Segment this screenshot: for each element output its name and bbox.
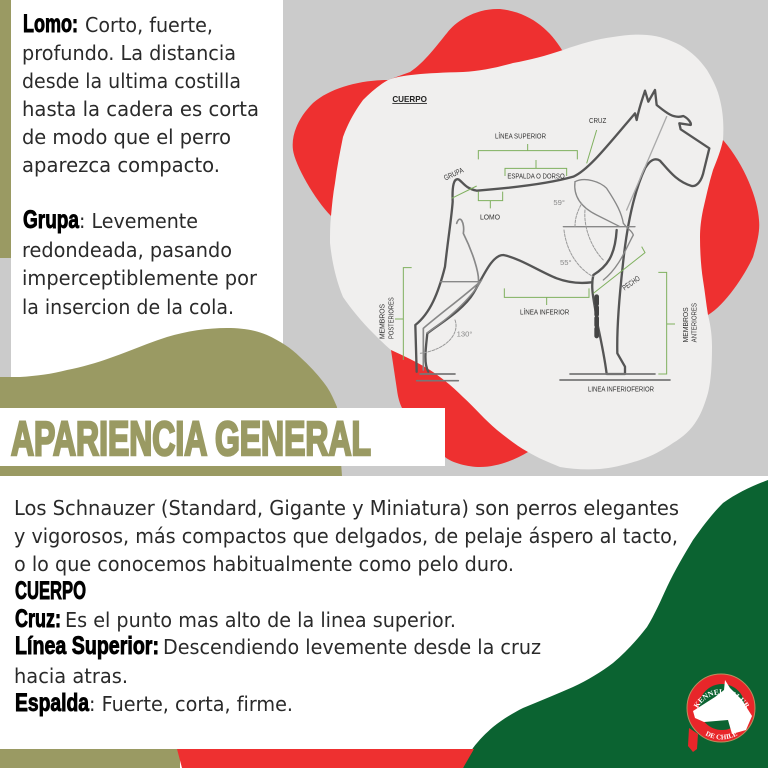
text block: lomo and grupa: aparezca compacto. xyxy=(22,153,220,177)
text block: description: Es el punto mas alto de la linea superior. xyxy=(65,608,456,632)
text block: lomo and grupa: de modo que el perro xyxy=(22,125,231,149)
text block: description: Descendiendo levemente desde la cruz xyxy=(163,635,541,659)
diagram labels: MEMBROS xyxy=(681,307,690,342)
diagram labels: 59° xyxy=(553,198,565,207)
olive bottom strip xyxy=(0,749,180,768)
text block: lomo and grupa: redondeada, pasando xyxy=(22,238,232,262)
diagram labels: LINEA INFERIOFERIOR xyxy=(588,384,654,393)
text block: description xyxy=(14,496,679,717)
text block: lomo and grupa: la insercion de la cola. xyxy=(22,295,234,319)
title band xyxy=(0,408,445,466)
icon: kennel club logo: DE CHILE xyxy=(705,731,738,740)
diagram labels xyxy=(377,116,699,393)
diagram labels: 55° xyxy=(560,258,572,267)
olive hump shape xyxy=(0,328,342,476)
diagram: dog body xyxy=(377,90,709,393)
text block: lomo and grupa: imperceptiblemente por xyxy=(22,266,258,290)
text block: lomo and grupa: hasta la cadera es corta xyxy=(22,97,259,121)
diagram labels: GRUPA xyxy=(442,165,466,182)
diagram labels: PECHO xyxy=(621,274,642,292)
red blob behind diagram xyxy=(293,9,759,467)
diagram labels: LOMO xyxy=(480,213,500,222)
diagram labels: ESPALDA O DORSO xyxy=(507,171,565,180)
text block: lomo and grupa: Lomo: xyxy=(23,10,78,38)
icon: kennel club logo: KENNEL CLUB xyxy=(694,689,749,708)
text block: lomo and grupa: Corto, fuerte, xyxy=(85,13,213,37)
background panel: white lower area xyxy=(0,476,768,768)
olive strip xyxy=(0,0,11,258)
text block: description: hacia atras. xyxy=(14,664,128,688)
text block: lomo and grupa: desde la ultima costilla xyxy=(22,69,241,93)
diagram heading: CUERPO xyxy=(392,94,427,104)
text block: lomo and grupa xyxy=(22,10,259,319)
diagram labels: LÍNEA INFERIOR xyxy=(520,308,570,317)
title: APARIENCIA GENERAL xyxy=(11,413,371,466)
green corner shape xyxy=(463,480,768,768)
icon: kennel club logo xyxy=(686,674,756,752)
background panel: gray xyxy=(0,0,768,476)
text block: lomo and grupa: Grupa xyxy=(23,206,80,234)
white blob behind diagram xyxy=(330,35,723,469)
text block: description: y vigorosos, más compactos que delgados, de pelaje áspero al tacto, xyxy=(14,524,678,548)
diagram labels: ANTERIORES xyxy=(690,303,699,342)
diagram labels: CRUZ xyxy=(589,116,607,125)
text block: description: : Fuerte, corta, firme. xyxy=(89,692,293,716)
red bottom strip xyxy=(177,749,474,768)
text block: description: Línea Superior: xyxy=(15,632,159,660)
diagram labels: LÍNEA SUPERIOR xyxy=(495,131,546,140)
text block: description: CUERPO xyxy=(15,577,86,605)
text block: description: Los Schnauzer (Standard, Gigante y Miniatura) son perros elegantes xyxy=(14,496,679,520)
text block: description: o lo que conocemos habitualmente como pelo duro. xyxy=(14,552,514,576)
green brackets xyxy=(395,130,675,374)
diagram labels: POSTERIORES xyxy=(386,297,395,339)
text block: description: Cruz: xyxy=(15,605,61,633)
panel: left text background xyxy=(11,0,283,385)
diagram labels: 130° xyxy=(457,330,473,339)
text block: description: Espalda xyxy=(15,689,90,717)
text block: lomo and grupa: : Levemente xyxy=(79,209,198,233)
dog outline xyxy=(415,90,709,381)
text block: lomo and grupa: profundo. La distancia xyxy=(22,41,236,65)
diagram labels: MEMBROS xyxy=(377,304,386,339)
